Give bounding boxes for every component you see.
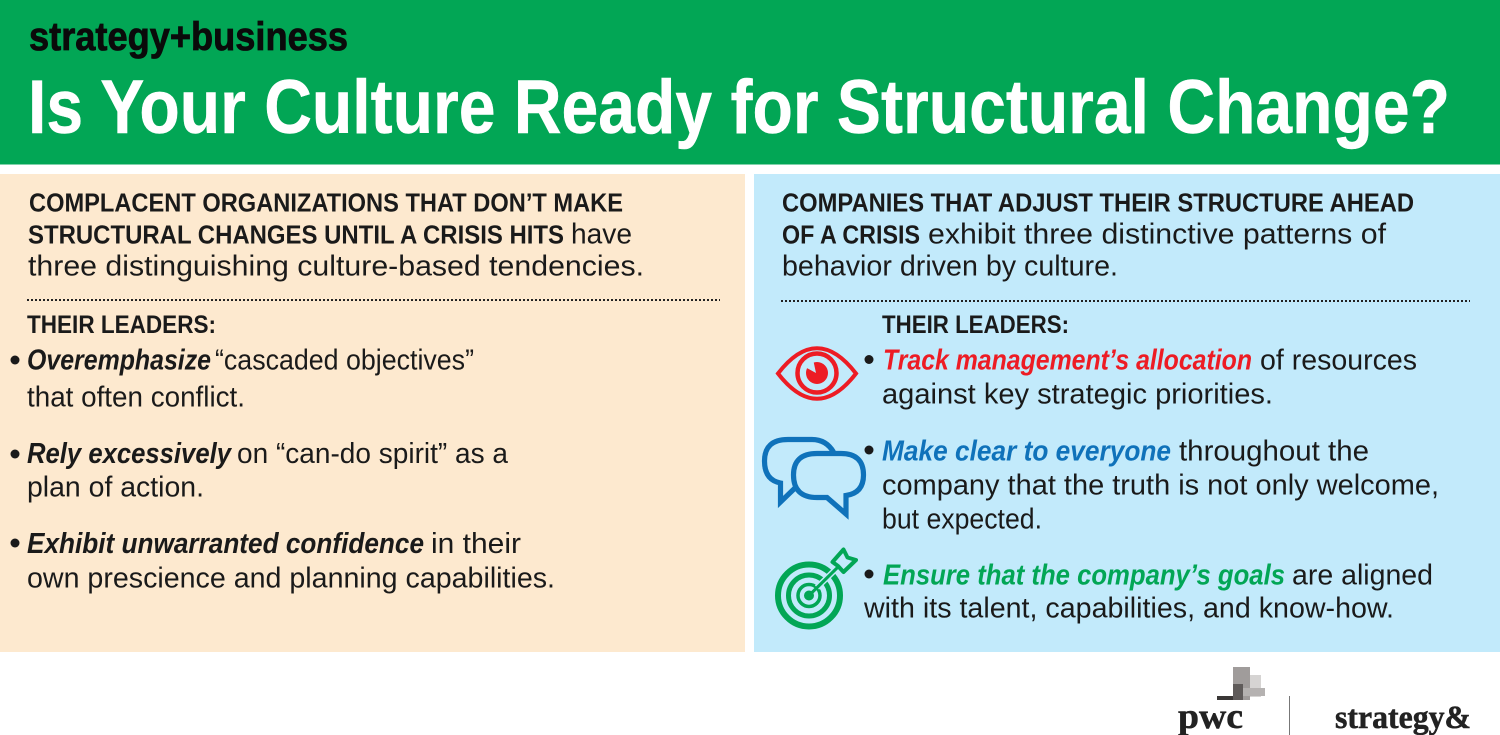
panel: proactive companies [754, 174, 1500, 652]
logo: pwc [1178, 667, 1265, 735]
bullet: track management's allocation: Track management’s allocation [883, 344, 1252, 376]
publication name: strategy+business [29, 15, 348, 59]
icon: target with arrow [778, 550, 856, 626]
panel heading: STRUCTURAL CHANGES UNTIL A CRISIS HITS [28, 220, 564, 250]
bullet: make clear to everyone: throughout the [1179, 436, 1369, 468]
header banner [0, 0, 1500, 164]
panel heading [782, 188, 1414, 282]
bullet: exhibit unwarranted confidence: in their [431, 528, 521, 560]
bullet: ensure the company's goals: are aligned [1292, 560, 1433, 592]
bullet: overemphasize [10, 344, 474, 414]
panel heading: COMPLACENT ORGANIZATIONS THAT DON’T MAKE [29, 188, 623, 218]
bullet: track management's allocation: against key strategic priorities. [882, 378, 1273, 410]
logo: pwc: pwc [1178, 696, 1243, 735]
bullet: make clear to everyone: Make clear to everyone [882, 436, 1171, 468]
icon: speech bubbles [764, 440, 864, 514]
panel: complacent organizations [0, 174, 745, 652]
panel heading: have [571, 218, 632, 250]
bullet: make clear to everyone [864, 436, 1439, 536]
panel heading: exhibit three distinctive patterns of [928, 218, 1387, 250]
bullet: rely excessively [10, 438, 509, 504]
bullet: exhibit unwarranted confidence: Exhibit unwarranted confidence [27, 528, 424, 560]
panel heading: three distinguishing culture-based tendencies. [28, 250, 644, 282]
panel heading: OF A CRISIS [782, 220, 920, 250]
panel heading: behavior driven by culture. [782, 250, 1118, 282]
bullet: exhibit unwarranted confidence: own prescience and planning capabilities. [27, 562, 555, 594]
icon: eye [778, 348, 856, 399]
bullet: overemphasize: that often conflict. [27, 382, 245, 414]
bullet: rely excessively: on “can-do spirit” as a [237, 438, 509, 470]
bullet: ensure the company's goals: with its talent, capabilities, and know-how. [863, 592, 1394, 624]
bullet: overemphasize: Overemphasize [27, 344, 211, 376]
panel heading: COMPANIES THAT ADJUST THEIR STRUCTURE AHEAD [782, 188, 1414, 218]
panel heading [28, 188, 644, 282]
their leaders label: THEIR LEADERS: [27, 311, 216, 339]
their leaders label: THEIR LEADERS: [882, 311, 1069, 339]
bullet: overemphasize: “cascaded objectives” [215, 344, 474, 376]
bullet: exhibit unwarranted confidence [10, 528, 555, 594]
bullet: rely excessively: Rely excessively [27, 438, 233, 470]
bullet: make clear to everyone: but expected. [882, 504, 1042, 536]
bullet: rely excessively: plan of action. [27, 472, 204, 504]
bullet: ensure the company's goals: Ensure that the company’s goals [883, 560, 1285, 592]
logo: strategy&: strategy& [1335, 700, 1471, 735]
bullet: ensure the company's goals [863, 560, 1433, 624]
bullet: track management's allocation: of resources [1260, 344, 1417, 376]
divider between logos [1288, 696, 1290, 735]
bullet: make clear to everyone: company that the truth is not only welcome, [882, 470, 1439, 502]
bullet: track management's allocation [864, 344, 1417, 410]
